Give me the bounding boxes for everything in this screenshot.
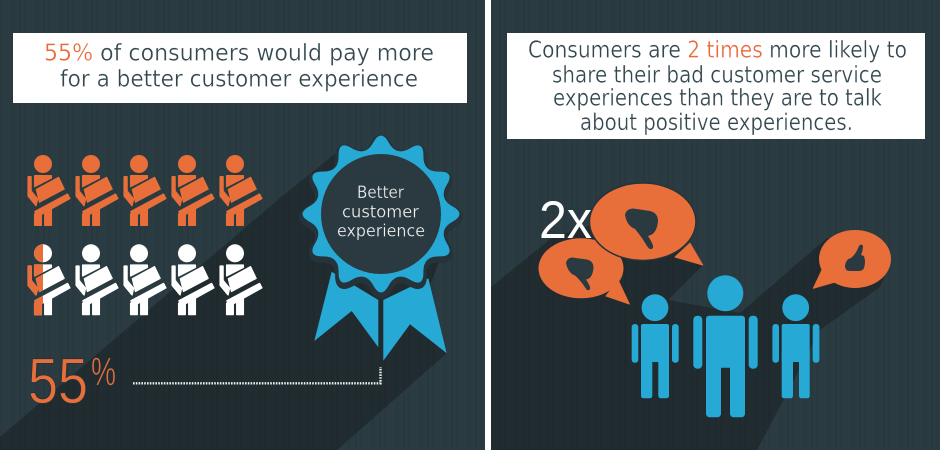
speech bubble: small thumbs down [538,238,629,304]
heading: right: share their bad customer service [552,60,882,88]
icon: person left [632,294,679,398]
stat: 2x: 2x [539,191,592,250]
heading: right: Consumers are 2 times more likely to [528,35,907,63]
badge text [337,183,425,242]
icon: award ribbon [303,136,459,361]
panel: left background [0,0,485,450]
stat: 55%: 55 [28,345,88,417]
badge text: customer [342,203,419,223]
heading: right: about positive experiences. [580,108,853,136]
heading: right [507,33,925,139]
badge text: experience [337,222,425,242]
panel divider [485,0,491,450]
stat: 55%: % [91,350,116,394]
icon row: white people [28,244,262,314]
panel: right background [491,0,940,450]
dotted connector line [133,367,380,383]
speech bubble: thumbs up [813,230,891,288]
heading: right: experiences than they are to talk [553,84,882,112]
heading: left [13,33,467,103]
badge text: Better [357,183,404,203]
icon: person centre [693,275,758,417]
heading: left: 55% of consumers would pay more [44,39,434,67]
icon: person right [772,294,819,398]
speech bubble: large thumbs down [590,184,703,265]
heading: left: for a better customer experience [60,65,418,93]
icon row: orange people [28,155,262,225]
